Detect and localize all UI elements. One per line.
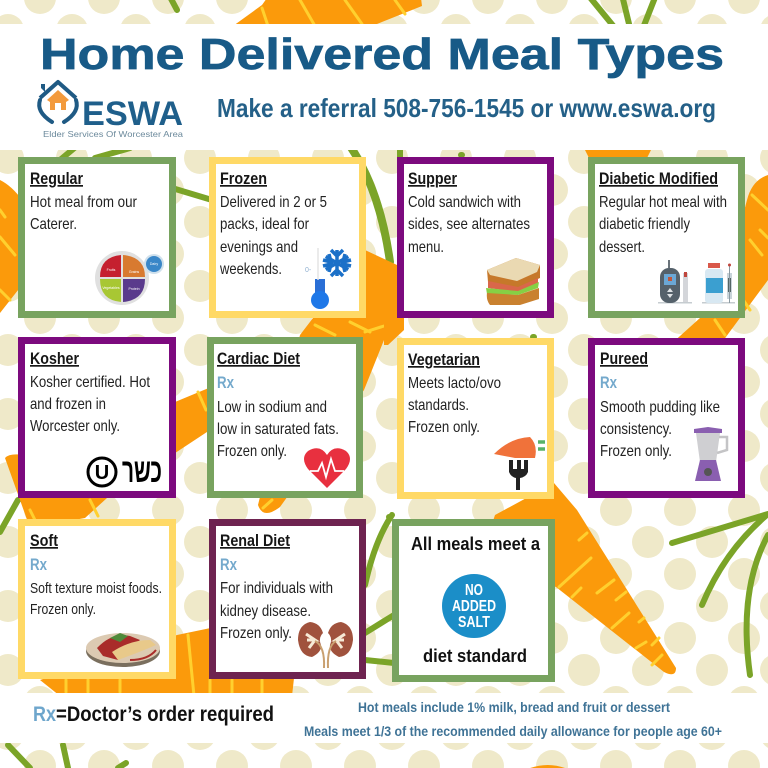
title: Home Delivered Meal Types bbox=[40, 30, 724, 79]
panel: vegetarian bbox=[400, 342, 550, 496]
description: Frozen only. bbox=[217, 443, 287, 460]
description: Meets lacto/ovo bbox=[408, 375, 501, 392]
carrot: centre diagonal bbox=[258, 250, 412, 513]
rx label: Rx bbox=[600, 373, 617, 392]
description: consistency. bbox=[600, 421, 672, 438]
description bbox=[217, 399, 339, 460]
icon: food plate: Protein bbox=[128, 287, 140, 291]
icon: kosher symbol bbox=[88, 452, 162, 490]
badge: no added salt bbox=[442, 574, 506, 638]
panel: regular bbox=[22, 160, 172, 314]
description: Low in sodium and bbox=[217, 399, 327, 416]
icon: kosher symbol: כשר bbox=[122, 452, 162, 490]
icon: heart with pulse bbox=[304, 448, 350, 488]
description: Frozen only. bbox=[220, 625, 292, 642]
icon: sandwich bbox=[486, 258, 540, 305]
heading: Diabetic Modified bbox=[599, 169, 718, 188]
carrot: top bbox=[233, 0, 422, 26]
description: Smooth pudding like bbox=[600, 399, 720, 416]
icon: thermometer and snowflake: 0- bbox=[305, 267, 312, 274]
heading: Kosher bbox=[30, 349, 79, 368]
description bbox=[30, 580, 162, 618]
description: packs, ideal for bbox=[220, 216, 310, 233]
description bbox=[220, 580, 333, 642]
description bbox=[408, 375, 501, 436]
description bbox=[408, 194, 530, 256]
heading: Soft bbox=[30, 531, 58, 550]
icon: food plate bbox=[95, 251, 164, 305]
icon: food plate: Grains bbox=[129, 270, 139, 274]
icon: blender bbox=[694, 427, 727, 481]
icon: pasta plate bbox=[86, 633, 160, 667]
note: daily allowance: Meals meet 1/3 of the recommended daily allowance for people age 60+ bbox=[304, 723, 722, 739]
description bbox=[219, 194, 327, 278]
icon: food plate: Dairy bbox=[150, 262, 158, 266]
panel: diabetic modified bbox=[592, 160, 742, 314]
description: kidney disease. bbox=[220, 603, 311, 620]
rx label: Rx bbox=[30, 555, 47, 574]
description: Soft texture moist foods. bbox=[30, 580, 162, 597]
panel: soft bbox=[22, 522, 172, 676]
carrot: lower-left diagonal bbox=[5, 375, 240, 528]
panel: pureed bbox=[592, 342, 742, 494]
carrot: bottom band bbox=[525, 765, 570, 768]
panel: frozen bbox=[212, 160, 362, 314]
description: Caterer. bbox=[30, 216, 77, 233]
description: dessert. bbox=[599, 239, 645, 256]
description: sides, see alternates bbox=[408, 216, 530, 233]
description: Hot meal from our bbox=[30, 194, 138, 211]
panel: supper bbox=[400, 160, 550, 314]
description: Kosher certified. Hot bbox=[30, 374, 150, 391]
description: Frozen only. bbox=[600, 443, 672, 460]
heading: Cardiac Diet bbox=[217, 349, 300, 368]
description: Cold sandwich with bbox=[408, 194, 521, 211]
description bbox=[30, 194, 138, 233]
icon: food plate: Vegetables bbox=[102, 286, 120, 290]
carrot: left edge bbox=[0, 180, 22, 313]
icon: kidneys bbox=[298, 622, 353, 668]
callout heading: All meals meet a bbox=[411, 534, 541, 554]
description: evenings and bbox=[220, 239, 298, 256]
legend: rx meaning: =Doctor’s order required bbox=[56, 703, 274, 726]
badge: no added salt: ADDED bbox=[452, 598, 496, 615]
logo: ESWA bbox=[39, 82, 183, 139]
panel: renal diet bbox=[212, 522, 362, 676]
description: Worcester only. bbox=[30, 418, 120, 435]
heading: Renal Diet bbox=[220, 531, 290, 550]
carrot: large lower right bbox=[480, 483, 676, 674]
description: Delivered in 2 or 5 bbox=[220, 194, 327, 211]
heading: Pureed bbox=[600, 349, 648, 368]
badge: no added salt: SALT bbox=[458, 614, 490, 631]
header white band bbox=[0, 24, 768, 150]
panel: kosher bbox=[22, 340, 172, 494]
carrot: right side bbox=[670, 175, 768, 345]
rx label: Rx bbox=[217, 373, 234, 392]
heading: Supper bbox=[408, 169, 457, 188]
description: weekends. bbox=[219, 261, 282, 278]
description: standards. bbox=[408, 397, 469, 414]
heading: Vegetarian bbox=[408, 350, 480, 369]
footer white band bbox=[0, 693, 768, 743]
description: Frozen only. bbox=[30, 601, 96, 618]
logo: ESWA: ESWA bbox=[82, 95, 183, 133]
heading: Frozen bbox=[220, 169, 267, 188]
icon: kosher symbol: U bbox=[95, 462, 109, 484]
note: hot meals: Hot meals include 1% milk, bread and fruit or dessert bbox=[358, 699, 670, 715]
description: Regular hot meal with bbox=[599, 194, 727, 211]
description: diabetic friendly bbox=[599, 216, 690, 233]
description bbox=[599, 194, 727, 256]
legend: rx meaning: Rx bbox=[33, 703, 56, 726]
description bbox=[30, 374, 150, 435]
logo: ESWA: Elder Services Of Worcester Area bbox=[43, 129, 183, 139]
description: and frozen in bbox=[30, 396, 106, 413]
panel: cardiac diet bbox=[210, 340, 360, 494]
description: menu. bbox=[408, 239, 444, 256]
rx label: Rx bbox=[220, 555, 237, 574]
panel: all meals callout bbox=[396, 522, 552, 678]
badge: no added salt: NO bbox=[465, 582, 483, 599]
icon: food plate: Fruits bbox=[107, 268, 116, 272]
icon: house in hands bbox=[39, 82, 77, 122]
heading: Regular bbox=[30, 169, 83, 188]
description: low in saturated fats. bbox=[217, 421, 339, 438]
icon: thermometer and snowflake bbox=[305, 248, 351, 309]
description: For individuals with bbox=[220, 580, 333, 597]
description: Frozen only. bbox=[408, 419, 480, 436]
icon: carrot on fork bbox=[494, 437, 545, 490]
carrot: behind supper and diabetic bbox=[584, 148, 652, 160]
icon: glucose meter and insulin bbox=[658, 260, 735, 304]
description bbox=[600, 399, 720, 460]
callout footer: diet standard bbox=[423, 646, 527, 666]
carrot: bottom bbox=[40, 625, 300, 696]
